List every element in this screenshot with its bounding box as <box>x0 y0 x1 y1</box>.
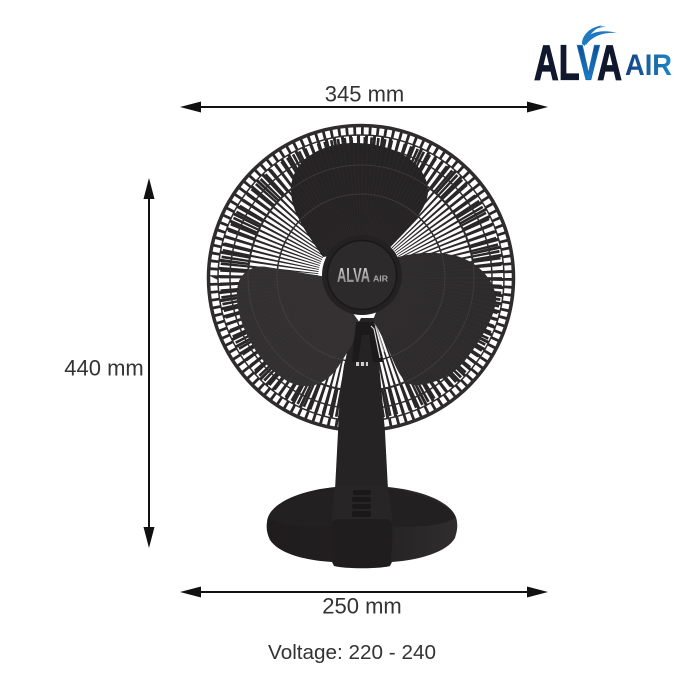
logo wordmark AIR: AIR <box>625 49 672 82</box>
fan illustration <box>208 126 514 568</box>
arrow: height <box>144 178 154 548</box>
arrow: top width <box>180 102 548 112</box>
base top face <box>269 489 455 527</box>
base body <box>267 487 457 568</box>
blade: right <box>373 253 496 385</box>
hub logo ALVA: ALVA <box>337 265 370 287</box>
fan guard wires <box>208 126 514 430</box>
motor controls <box>352 322 384 366</box>
voltage note: Voltage: 220 - 240 <box>268 641 436 664</box>
logo: Alva Air <box>534 25 672 90</box>
stand neck <box>335 318 388 490</box>
blade: top <box>291 143 428 257</box>
fan base <box>267 487 457 568</box>
blade: left <box>237 267 360 386</box>
fan blades <box>237 143 496 391</box>
fan hub <box>322 235 402 315</box>
logo wordmark ALVA: ALVA <box>534 36 622 90</box>
base front lobe <box>332 519 392 568</box>
blade ribs <box>248 165 474 391</box>
dimension: height 440 mm <box>64 178 154 548</box>
base front bump <box>332 487 392 523</box>
label: 250 mm: 250 mm <box>322 594 402 618</box>
hub logo AIR: AIR <box>373 274 388 284</box>
logo swoosh <box>582 25 617 46</box>
label: 440 mm: 440 mm <box>64 356 144 380</box>
arrow: base width <box>180 586 548 598</box>
label: 345 mm: 345 mm <box>325 82 404 106</box>
dimension: width 345 mm <box>180 82 548 112</box>
dimension: base 250 mm <box>180 586 548 618</box>
neck spring <box>352 490 371 517</box>
